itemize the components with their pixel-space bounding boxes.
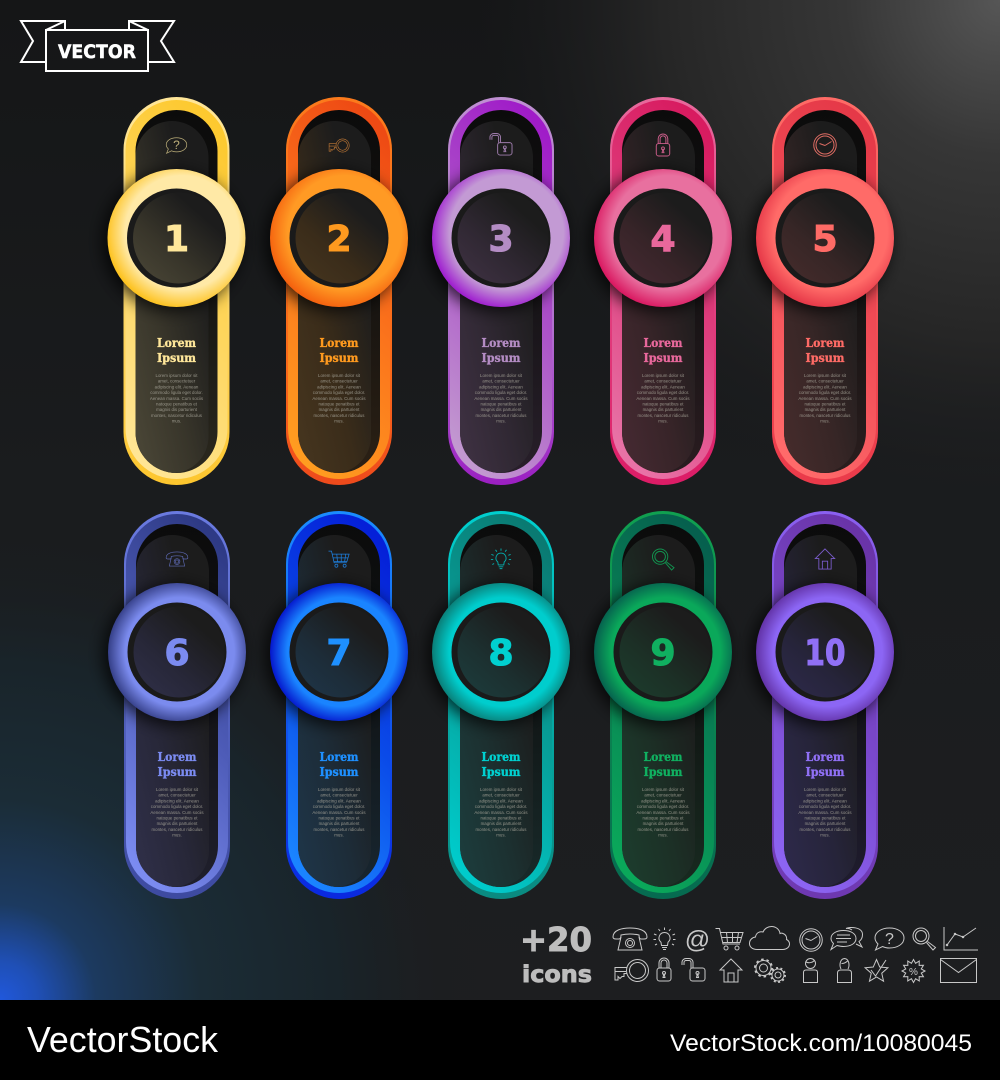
body text 9: adipiscing elit. Aenean (641, 798, 685, 803)
body text 2: natoque penatibus et (318, 402, 360, 406)
body text 5: Aenean massa. Cum sociis (798, 396, 852, 401)
heading 1: Lorem (157, 336, 196, 350)
body text 3: adipiscing elit. Aenean (479, 384, 523, 389)
pill 7 (286, 511, 392, 899)
number 2: 2 (326, 219, 352, 260)
body text 5: Lorem ipsum dolor sit (804, 373, 847, 378)
body text 9: mus. (658, 833, 668, 838)
footer url: VectorStock.com/10080045 (670, 1030, 972, 1057)
body text 6: montes, nascetur ridiculus (151, 827, 203, 832)
body text 2: amet, consectetuer (320, 379, 358, 384)
icon: question bubble: ? (173, 138, 180, 152)
body text 8: Lorem ipsum dolor sit (480, 787, 523, 792)
body text 10: natoque penatibus et (804, 816, 846, 820)
body text 7: natoque penatibus et (318, 816, 360, 820)
ring 10 (751, 583, 894, 725)
body text 7: Aenean massa. Cum sociis (312, 810, 366, 815)
pill 8 (448, 511, 554, 899)
heading 8: Ipsum (482, 765, 521, 779)
column 3 (427, 97, 570, 485)
column 9 (589, 511, 732, 899)
ring 5 (751, 169, 894, 311)
number 5: 5 (812, 219, 838, 260)
heading 5: Ipsum (806, 351, 845, 365)
body text 8: amet, consectetuer (482, 793, 520, 798)
body text 2: magnis dis parturient (319, 407, 360, 412)
icon set legend (613, 926, 978, 982)
icon: telephone (166, 552, 188, 566)
body text 2: adipiscing elit. Aenean (317, 384, 361, 389)
pill 4 (610, 97, 716, 485)
body text 8: adipiscing elit. Aenean (479, 798, 523, 803)
icon: question bubble (166, 138, 187, 153)
icon: house (815, 549, 835, 569)
ring 6 (103, 583, 246, 725)
body text 3: mus. (496, 419, 506, 424)
body text 4: mus. (658, 419, 668, 424)
body text 4: montes, nascetur ridiculus (637, 413, 689, 418)
body text 6: Aenean massa. Cum sociis (150, 810, 204, 815)
body text 5: adipiscing elit. Aenean (803, 384, 847, 389)
body text 5: amet, consectetuer (806, 379, 844, 384)
icon: magnifier (652, 549, 674, 570)
heading 5: Lorem (806, 336, 845, 350)
body text 1: Lorem ipsum dolor sit (156, 373, 198, 378)
column 8 (427, 511, 570, 899)
body text 1: magnis dis parturient (156, 407, 198, 412)
heading 4: Lorem (644, 336, 683, 350)
heading 3: Ipsum (482, 351, 521, 365)
body text 10: mus. (820, 833, 830, 838)
body text 4: commodo ligula eget dolor. (637, 390, 689, 395)
icon set legend: % (909, 967, 918, 978)
body text 2: mus. (334, 419, 344, 424)
body text 10: adipiscing elit. Aenean (803, 798, 847, 803)
body text 1: montes, nascetur ridiculus (151, 413, 203, 418)
column 10 (751, 511, 894, 899)
body text 3: commodo ligula eget dolor. (475, 390, 527, 395)
ring 7 (265, 583, 408, 725)
body text 7: adipiscing elit. Aenean (317, 798, 361, 803)
icon: padlock (656, 134, 670, 156)
number 10: 10 (804, 633, 846, 674)
column 4 (589, 97, 732, 485)
body text 3: amet, consectetuer (482, 379, 520, 384)
body text 10: magnis dis parturient (805, 821, 846, 826)
body text 8: commodo ligula eget dolor. (475, 804, 527, 809)
body text 6: mus. (172, 833, 182, 838)
number 8: 8 (488, 633, 514, 674)
heading 7: Ipsum (320, 765, 359, 779)
number 4: 4 (650, 219, 676, 260)
column 5 (751, 97, 894, 485)
number 6: 6 (164, 633, 190, 674)
heading 6: Lorem (158, 750, 197, 764)
body text 2: montes, nascetur ridiculus (313, 413, 365, 418)
body text 5: montes, nascetur ridiculus (799, 413, 851, 418)
ring 4 (589, 169, 732, 311)
body text 9: magnis dis parturient (643, 821, 684, 826)
pill 1 (124, 97, 230, 485)
body text 2: commodo ligula eget dolor. (313, 390, 365, 395)
column 6 (103, 511, 246, 899)
body text 4: amet, consectetuer (644, 379, 682, 384)
+20 icons label: +20 (520, 920, 592, 959)
icon set legend: @ (685, 926, 710, 954)
body text 1: natoque penatibus et (156, 402, 198, 406)
body text 8: Aenean massa. Cum sociis (474, 810, 528, 815)
body text 1: adipiscing elit. Aenean (155, 384, 199, 389)
footer logo: VectorStock (27, 1019, 219, 1060)
body text 9: montes, nascetur ridiculus (637, 827, 689, 832)
body text 7: Lorem ipsum dolor sit (318, 787, 361, 792)
body text 9: commodo ligula eget dolor. (637, 804, 689, 809)
heading 8: Lorem (482, 750, 521, 764)
+20 icons label: icons (522, 962, 592, 988)
body text 3: Aenean massa. Cum sociis (474, 396, 528, 401)
body text 4: adipiscing elit. Aenean (641, 384, 685, 389)
body text 4: Lorem ipsum dolor sit (642, 373, 685, 378)
pill 2 (286, 97, 392, 485)
body text 6: Lorem ipsum dolor sit (156, 787, 199, 792)
pill 9 (610, 511, 716, 899)
body text 6: amet, consectetuer (158, 793, 196, 798)
heading 3: Lorem (482, 336, 521, 350)
body text 7: commodo ligula eget dolor. (313, 804, 365, 809)
body text 1: commodo ligula eget dolor. (150, 390, 203, 395)
body text 6: natoque penatibus et (156, 816, 198, 820)
body text 1: amet, consectetuer (158, 379, 196, 384)
heading 1: Ipsum (157, 351, 196, 365)
heading 2: Ipsum (320, 351, 359, 365)
pill 3 (448, 97, 554, 485)
body text 1: Aenean massa. Cum sociis (150, 396, 204, 401)
icon: clock (814, 134, 836, 156)
body text 5: magnis dis parturient (805, 407, 846, 412)
body text 5: natoque penatibus et (804, 402, 846, 406)
body text 7: mus. (334, 833, 344, 838)
pill 10 (772, 511, 878, 899)
vector ribbon badge: VECTOR (58, 41, 136, 63)
body text 9: Lorem ipsum dolor sit (642, 787, 685, 792)
heading 6: Ipsum (158, 765, 197, 779)
number 7: 7 (326, 633, 352, 674)
body text 3: natoque penatibus et (480, 402, 522, 406)
body text 6: commodo ligula eget dolor. (151, 804, 203, 809)
body text 10: montes, nascetur ridiculus (799, 827, 851, 832)
heading 2: Lorem (320, 336, 359, 350)
heading 4: Ipsum (644, 351, 683, 365)
icon: shopping cart (328, 551, 349, 567)
body text 3: magnis dis parturient (481, 407, 522, 412)
body text 9: Aenean massa. Cum sociis (636, 810, 690, 815)
pill 6 (124, 511, 230, 899)
icon: light bulb (491, 548, 511, 569)
body text 7: magnis dis parturient (319, 821, 360, 826)
body text 5: mus. (820, 419, 830, 424)
ring 8 (427, 583, 570, 725)
heading 10: Ipsum (806, 765, 845, 779)
body text 3: Lorem ipsum dolor sit (480, 373, 523, 378)
body text 10: Lorem ipsum dolor sit (804, 787, 847, 792)
body text 6: adipiscing elit. Aenean (155, 798, 199, 803)
number 3: 3 (488, 219, 514, 260)
heading 10: Lorem (806, 750, 845, 764)
body text 4: natoque penatibus et (642, 402, 684, 406)
body text 4: magnis dis parturient (643, 407, 684, 412)
body text 3: montes, nascetur ridiculus (475, 413, 527, 418)
body text 10: amet, consectetuer (806, 793, 844, 798)
body text 8: montes, nascetur ridiculus (475, 827, 527, 832)
ring 2 (265, 169, 408, 311)
ring 1 (102, 169, 246, 311)
heading 7: Lorem (320, 750, 359, 764)
body text 1: mus. (172, 419, 181, 424)
pill 5 (772, 97, 878, 485)
body text 10: commodo ligula eget dolor. (799, 804, 851, 809)
icon: key (329, 139, 349, 152)
column 7 (265, 511, 408, 899)
body text 6: magnis dis parturient (157, 821, 198, 826)
body text 10: Aenean massa. Cum sociis (798, 810, 852, 815)
number 1: 1 (164, 219, 189, 260)
footer bar (0, 1000, 1000, 1080)
body text 2: Aenean massa. Cum sociis (312, 396, 366, 401)
icon set legend: ? (885, 931, 894, 948)
body text 4: Aenean massa. Cum sociis (636, 396, 690, 401)
body text 7: amet, consectetuer (320, 793, 358, 798)
column 1 (102, 97, 246, 485)
body text 8: natoque penatibus et (480, 816, 522, 820)
body text 5: commodo ligula eget dolor. (799, 390, 851, 395)
ring 3 (427, 169, 570, 311)
body text 7: montes, nascetur ridiculus (313, 827, 365, 832)
heading 9: Lorem (644, 750, 683, 764)
number 9: 9 (650, 633, 676, 674)
body text 8: magnis dis parturient (481, 821, 522, 826)
vector ribbon badge (21, 21, 174, 71)
body text 9: natoque penatibus et (642, 816, 684, 820)
heading 9: Ipsum (644, 765, 683, 779)
column 2 (265, 97, 408, 485)
+20 icons label (520, 920, 592, 988)
body text 2: Lorem ipsum dolor sit (318, 373, 361, 378)
body text 9: amet, consectetuer (644, 793, 682, 798)
body text 8: mus. (496, 833, 506, 838)
icon: open padlock (490, 133, 512, 155)
ring 9 (589, 583, 732, 725)
